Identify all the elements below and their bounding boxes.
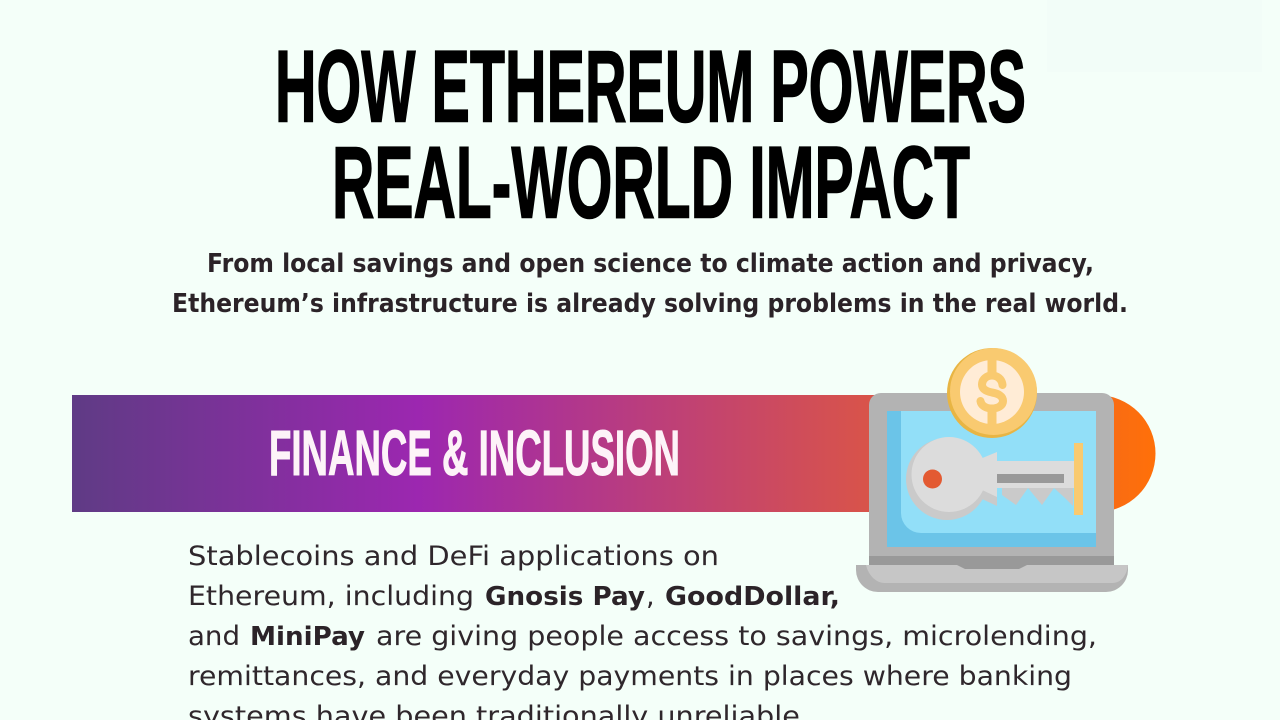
body paragraph (188, 541, 1097, 720)
subtitle: Ethereum’s infrastructure is already solving problems in the real world. (172, 289, 1128, 319)
laptop base (856, 565, 1128, 592)
section heading: FINANCE & INCLUSION (269, 417, 680, 489)
body paragraph: Ethereum, including (188, 581, 474, 612)
body paragraph: are giving people access to savings, microlending, (376, 621, 1097, 652)
title (275, 30, 1026, 240)
body paragraph: MiniPay (250, 622, 365, 652)
body paragraph: and (188, 621, 240, 652)
body paragraph: , (646, 581, 655, 612)
body paragraph: Stablecoins and DeFi applications on (188, 541, 719, 572)
laptop lid (869, 393, 1114, 556)
body paragraph: remittances, and everyday payments in places where banking (188, 661, 1072, 692)
section banner: finance and inclusion (72, 395, 1156, 512)
subtitle: From local savings and open science to climate action and privacy, (207, 249, 1094, 279)
icon: laptop with key and coin (856, 348, 1128, 592)
subtitle (172, 249, 1128, 319)
coin (947, 348, 1037, 438)
body paragraph: GoodDollar, (665, 582, 840, 612)
key (906, 437, 1083, 520)
body paragraph: Gnosis Pay (485, 582, 645, 612)
